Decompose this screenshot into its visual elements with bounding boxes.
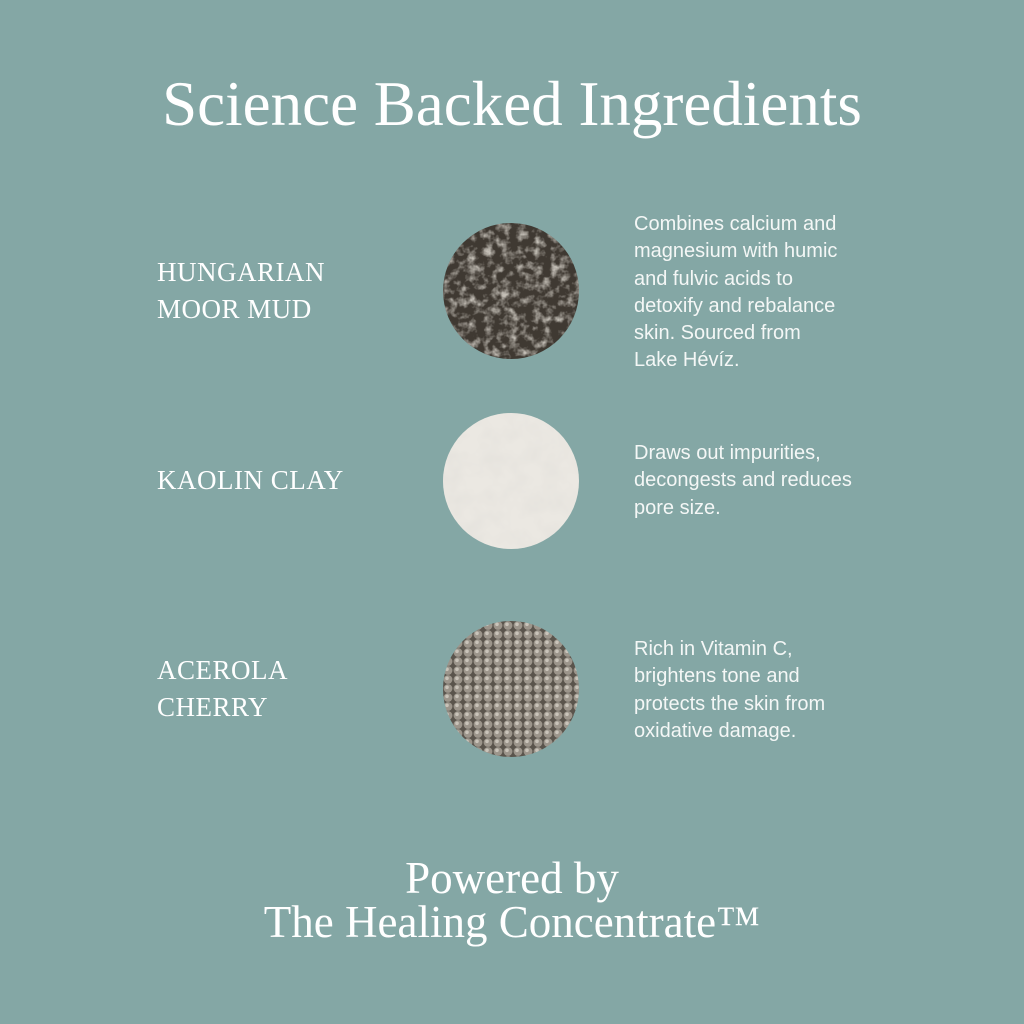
title: Science Backed Ingredients [162, 69, 862, 139]
label: hungarian moor mud: HUNGARIAN [157, 257, 325, 287]
description: kaolin clay: decongests and reduces [634, 469, 852, 491]
description: acerola cherry: oxidative damage. [634, 720, 796, 742]
description: moor mud: Combines calcium and [634, 213, 836, 235]
description: acerola cherry: brightens tone and [634, 665, 800, 687]
description: moor mud: magnesium with humic [634, 240, 837, 262]
description: moor mud: detoxify and rebalance [634, 295, 835, 317]
footer: powered by: Powered by [405, 853, 619, 903]
description: kaolin clay: Draws out impurities, [634, 442, 821, 464]
label: acerola cherry: CHERRY [157, 692, 268, 722]
footer: powered by: The Healing Concentrate™ [264, 897, 760, 947]
label: hungarian moor mud [157, 257, 325, 324]
description: moor mud [634, 213, 837, 371]
description: acerola cherry [634, 638, 825, 742]
label: acerola cherry [157, 655, 288, 722]
description: moor mud: and fulvic acids to [634, 268, 793, 290]
icon: kaolin clay circle [443, 413, 579, 549]
description: kaolin clay [634, 442, 852, 519]
icon: acerola beads circle [443, 621, 579, 757]
label: acerola cherry: ACEROLA [157, 655, 288, 685]
description: acerola cherry: Rich in Vitamin C, [634, 638, 793, 660]
description: moor mud: Lake Hévíz. [634, 349, 740, 371]
icon: moor mud circle [443, 223, 579, 359]
footer: powered by [264, 853, 760, 947]
description: acerola cherry: protects the skin from [634, 693, 825, 715]
description: kaolin clay: pore size. [634, 497, 721, 519]
description: moor mud: skin. Sourced from [634, 322, 801, 344]
label: kaolin clay: KAOLIN CLAY [157, 465, 344, 495]
label: hungarian moor mud: MOOR MUD [157, 294, 312, 324]
